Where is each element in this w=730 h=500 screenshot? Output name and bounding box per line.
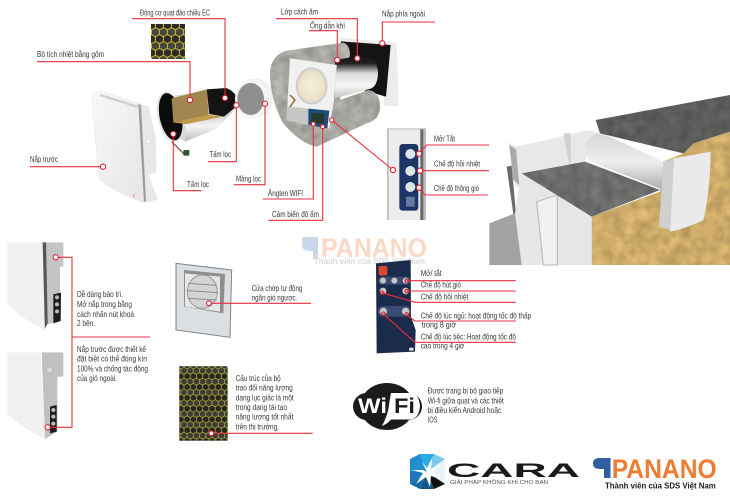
white duct housing [508,130,604,192]
text block: WiFi description: Được trang bị bộ giao tiếp [428,387,504,396]
callout: Cảm biến độ ẩm: Cảm biến độ ẩm [272,210,319,219]
callout: Tấm lọc lower: Tấm lọc [187,180,209,189]
text block: WiFi description: bị điều kiển Android hoặc [428,406,501,415]
callout: Cửa chớp tự động: ngăn gió ngược. [252,293,297,302]
callout: Ăngten WIFI [263,122,315,199]
callout: Chế độ hồi nhiệt remote: Chế độ hồi nhiệt [421,292,469,301]
icon: large hexagon swatch [179,366,228,441]
callout: Nắp trước: Nắp trước [30,155,58,164]
callout: Chế độ lúc tiệc: Chế độ lúc tiệc: Hoạt động tốc độ [421,332,516,341]
logo: CARA: GIẢI PHÁP KHÔNG KHÍ CHO BẠN [450,479,548,486]
callout: Mở/ Tắt [416,135,489,156]
logo: CARA: CARA [447,460,580,482]
wall installation illustration [489,95,730,265]
callout: hexagonal exchanger structure: Cấu trúc của bộ [236,374,281,383]
text block: easy maintenance: 2 bên. [77,319,95,328]
closed cover [7,352,63,439]
air duct [335,55,378,98]
callout: Ăngten WIFI: Ăngten WIFI [268,189,303,198]
text block: sealed front cover [77,345,148,383]
logo: CARA [410,454,580,489]
text block: easy maintenance: Dễ dàng bảo trì. [77,290,123,299]
insulation board [592,132,730,265]
icon: WiFi logo: Fi [394,395,415,418]
callout: cover bracket lines [45,255,150,430]
callout: hexagonal exchanger structure: trong dạng tái tạo [236,403,287,412]
watermark: Panano: Thành viên của SDS Việt Nam [314,257,425,266]
callout: Cửa chớp tự động: Cửa chớp tự động [252,284,302,293]
callout: Bộ tích nhiệt bằng gốm [37,50,193,103]
grey interior wall [489,213,523,265]
callout: Chế độ lúc ngủ: Chế độ lúc ngủ: hoạt động tốc độ thấp [421,311,532,320]
callout: remote Mở/ tắt: Mở/ tắt [421,269,442,278]
callout: Bộ tích nhiệt bằng gốm: Bộ tích nhiệt bằng gốm [37,50,104,59]
callout: hexagonal exchanger structure [209,374,313,436]
exploded product: front cover, heat exchanger and filter [92,79,272,203]
callout: hexagonal exchanger structure: trên thị trường. [236,422,279,431]
text block: sealed front cover: 100% và chống tác động [77,365,148,374]
callout: Chế độ hồi nhiệt remote [382,292,516,302]
callout: Lớp cách âm [276,8,360,61]
open cover [7,242,63,329]
watermark: Panano: PANANO [321,233,427,263]
text block: easy maintenance: Mở nắp trong bằng [77,300,132,309]
callout: Chế độ lúc tiệc: cao trong 4 giờ [421,341,465,350]
icon: shutter panel [176,263,232,337]
callout: Cảm biến độ ẩm [268,125,325,220]
callout: Chế độ thông gió [416,184,488,195]
duct pipe [585,134,667,189]
control panel close-up [387,128,426,220]
callout: Nắp phía ngoài: Nắp phía ngoài [382,10,425,19]
callout: Chế độ lúc tiệc [383,314,516,350]
text block: WiFi description: Wi-fi giữa quạt và các thiết [428,396,504,405]
callout: Màng lọc [234,101,268,185]
callout: Chế độ hút gió: Chế độ hút gió [421,281,461,290]
callout: Mở/ Tắt: Mở/ Tắt [434,135,456,144]
callout: Động cơ quạt đảo chiều EC: Động cơ quạt đảo chiều EC [140,9,210,18]
callout: Màng lọc: Màng lọc [236,174,261,184]
callout: hexagonal exchanger structure: trao đổi năng lượng [236,384,293,393]
callout: Tấm lọc upper [208,103,239,162]
filter ring [235,79,272,118]
callout: Lớp cách âm: Lớp cách âm [281,8,318,17]
logo: PANANO: Thành viên của SDS Việt Nam [605,482,716,491]
text block: easy maintenance [77,290,134,328]
white interior wall [515,173,592,265]
text block: WiFi description [428,387,504,425]
callout: Chế độ lúc ngủ: trong 8 giờ [422,321,457,330]
panel: cover open and closed [7,242,63,439]
text block: WiFi description: IOS [428,416,438,425]
text block: sealed front cover: của gió ngoài. [77,374,117,383]
text block: easy maintenance: cách nhấn nút khoá [77,310,134,319]
navy button strip [399,144,418,211]
concrete top [596,95,730,153]
logo: PANANO: PANANO [612,454,717,484]
remote control [376,260,416,353]
arrow: link to control panel [330,118,396,173]
logo: PANANO [593,454,717,491]
outer hood [340,38,399,106]
exploded product: wall sleeve and outer hood [270,38,399,147]
callout: Chế độ lúc ngủ [407,311,532,330]
ceramic heat exchanger cylinder [152,88,239,156]
mounting plate [287,58,337,128]
icon: small hexagon swatch [151,24,185,59]
callout: remote Mở/ tắt [407,269,516,281]
callout: Ống dẫn khí [309,21,346,63]
callout: Chế độ hút gió [407,281,516,291]
callout: Động cơ quạt đảo chiều EC [132,9,228,101]
callout: Nắp trước [30,155,106,169]
icon: WiFi logo [353,383,422,430]
front cover [92,91,157,203]
text block: sealed front cover: Nắp trước được thiết kế [77,345,146,354]
callout: Ống dẫn khí: Ống dẫn khí [310,21,346,31]
callout: hexagonal exchanger structure: năng lượng tốt nhất [236,412,294,421]
callout: Chế độ hồi nhiệt [417,160,489,173]
text block: sealed front cover: đặt biệt có thể đóng kín [77,355,147,364]
callout: hexagonal exchanger structure: dạng lục giác là một [236,393,294,402]
callout: Cửa chớp tự động [207,284,311,306]
callout: Chế độ thông gió: Chế độ thông gió [434,184,479,193]
concrete slab [522,162,660,217]
icon: WiFi logo: Wi [358,395,387,418]
indoor grille cover [659,152,711,232]
callout: Chế độ hồi nhiệt: Chế độ hồi nhiệt [434,160,481,169]
callout: Tấm lọc upper: Tấm lọc [210,150,231,159]
callout: Nắp phía ngoài [380,10,435,46]
callout: Tấm lọc lower [171,131,209,191]
insulation block [270,43,380,147]
